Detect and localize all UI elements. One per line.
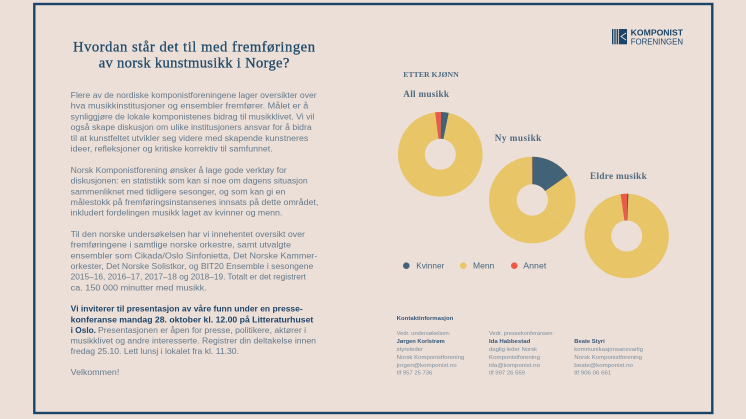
text block: third paragraph: ensembler som Cikada/Oslo Sinfonietta, Det Norske Kammer- (71, 251, 318, 260)
logo: Komponistforeningen (612, 29, 683, 46)
text block: third paragraph: ca. 150 000 minutter med musikk. (71, 283, 207, 292)
contact: Jørgen Korlstrøm: jorgen@komponist.no (396, 363, 457, 369)
title: Hvordan står det til med fremføringen (73, 40, 316, 56)
text block: third paragraph (71, 230, 318, 292)
contact: Beate Styri: Beate Styri (574, 339, 605, 345)
pie chart: Ny musikk (489, 133, 576, 243)
logo: Komponistforeningen: FORENINGEN (631, 37, 683, 46)
logo: Komponistforeningen: KOMPONIST (631, 29, 683, 38)
title: av norsk kunstmusikk i Norge? (99, 56, 289, 72)
text block: third paragraph: orkester, Det Norske Solistkor, og BIT20 Ensemble i sesongene (71, 262, 314, 271)
contact: Ida Habbestad (489, 331, 554, 377)
text block: invitation: Presentasjonen er åpen for presse, politikere, aktører i (98, 326, 306, 335)
text block: intro paragraph: Flere av de nordiske komponistforeningene lager oversikter over (71, 91, 317, 100)
text block: invitation: Vi inviterer til presentasjon av våre funn under en presse- (71, 304, 303, 314)
contact: Ida Habbestad: Vedr. pressekonferansen: (489, 331, 554, 337)
contact: Beate Styri: beate@komponist.no (574, 363, 633, 369)
legend: Annet (523, 262, 547, 270)
pie chart: Eldre musikk (584, 171, 669, 278)
contact: Ida Habbestad: Komponistforening (489, 355, 540, 361)
contact: Ida Habbestad: tlf 997 26 559 (489, 371, 525, 377)
text block: second paragraph (71, 166, 318, 218)
text block: invitation: fredag 25.10. Lett lunsj i lokalet fra kl. 11.30. (71, 347, 239, 356)
text block: second paragraph: inkludert fordelingen musikk laget av kvinner og menn. (71, 209, 282, 218)
chart heading: ETTER KJØNN (403, 70, 459, 79)
contact: Beate Styri: Norsk Komponistforening (574, 355, 642, 361)
contact: Ida Habbestad: daglig leder Norsk (489, 347, 537, 353)
pie chart: Eldre musikk: Eldre musikk (590, 171, 648, 181)
text block: intro paragraph: også skape diskusjon om ulike institusjoners ansvar for å bidra (71, 123, 312, 132)
contact: Jørgen Korlstrøm (396, 331, 464, 377)
text block: intro paragraph: synliggjøre de lokale komponistenes bidrag til musikklivet. Vi vil (71, 112, 315, 121)
contact: Ida Habbestad: Ida Habbestad (489, 339, 530, 345)
text block: second paragraph: sammenliknet med tidligere sesonger, og som kan gi en (71, 187, 285, 196)
contact: Jørgen Korlstrøm: tlf 957 25 736 (397, 371, 432, 377)
contact: Ida Habbestad: ida@komponist.no (489, 363, 540, 369)
contact: Beate Styri: tlf 906 06 661 (574, 371, 611, 377)
text block: intro paragraph: til at kunstfeltet utvikler seg videre med skapende kunstneres (71, 134, 308, 143)
legend (403, 262, 547, 270)
pie chart: Ny musikk: Ny musikk (495, 133, 542, 143)
text block: invitation: musikklivet og andre interesserte. Registrer din deltakelse innen (71, 336, 316, 346)
contact heading: Kontaktinformasjon (397, 316, 454, 322)
text block: third paragraph: Til den norske undersøkelsen har vi innehentet oversikt over (71, 230, 305, 239)
text block: invitation (71, 304, 316, 356)
contact: Beate Styri: kommunikasjonsansvarlig (574, 347, 643, 353)
text block: third paragraph: 2015–16, 2016–17, 2017–18 og 2018–19. Totalt er det registrert (71, 273, 307, 282)
text block: third paragraph: fremføringene i samtlige norske orkestre, samt utvalgte (71, 240, 292, 250)
contact: Jørgen Korlstrøm: Vedr. undersøkelsen: (397, 331, 451, 337)
pie chart: All musikk: All musikk (403, 89, 450, 99)
contact: Jørgen Korlstrøm: Norsk Komponistforening (397, 355, 464, 361)
text block: invitation: i Oslo. (71, 326, 96, 335)
legend: Kvinner (416, 262, 445, 270)
contact: Jørgen Korlstrøm: styreleder (397, 347, 423, 353)
text block: intro paragraph: ideer, refleksjoner og kritiske korrektiv til samfunnet. (71, 144, 273, 153)
contact: Beate Styri (574, 339, 643, 377)
text block: welcome: Velkommen! (71, 368, 119, 377)
text block: second paragraph: målestokk på fremføringsinstansenes innsats på dette området, (71, 198, 318, 207)
contact: Jørgen Korlstrøm: Jørgen Korlstrøm (397, 339, 445, 345)
legend: Menn (473, 262, 494, 270)
text block: invitation: konferanse mandag 28. oktober kl. 12.00 på Litteraturhuset (71, 315, 314, 324)
text block: intro paragraph (71, 91, 317, 153)
text block: intro paragraph: hva musikkinstitusjoner og ensembler fremfører. Målet er å (71, 102, 309, 111)
title (73, 40, 316, 72)
text block: second paragraph: Norsk Komponistforening ønsker å lage gode verktøy for (71, 166, 287, 175)
text block: second paragraph: diskusjonen: en statistikk som kan si noe om dagens situasjon (71, 177, 308, 186)
pie chart: All musikk (398, 89, 483, 197)
